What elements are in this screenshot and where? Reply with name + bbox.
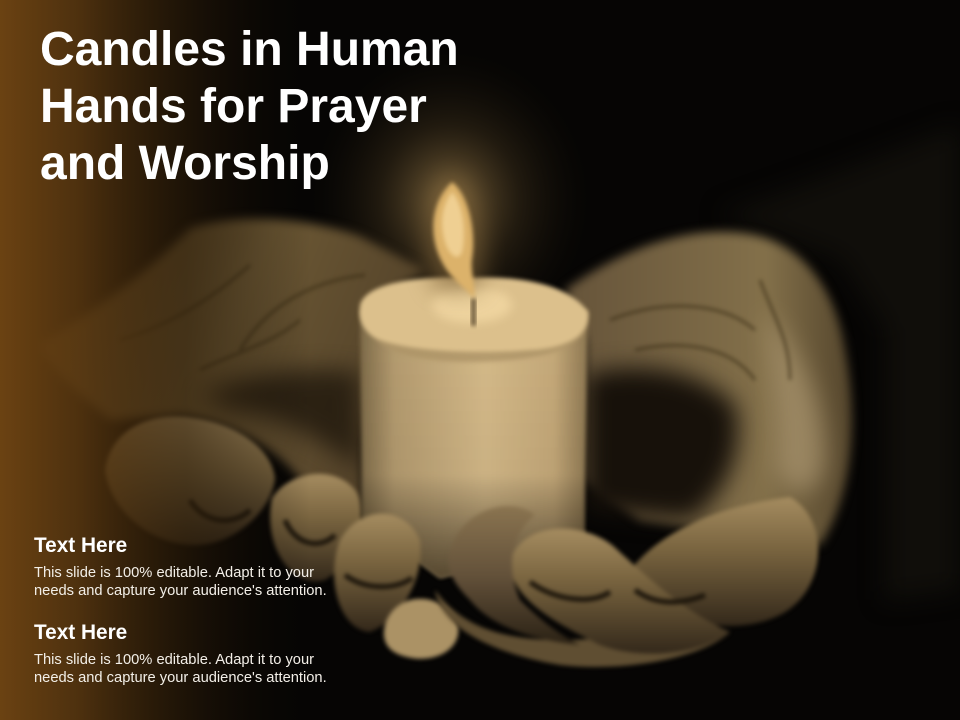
left hand (40, 219, 425, 505)
text block 2: Text Here (34, 621, 127, 644)
candle (360, 277, 588, 578)
glow around flame (310, 50, 590, 350)
text block 1 (34, 534, 327, 599)
text block 2: This slide is 100% editable. Adapt it to your (34, 652, 314, 668)
text block 1: needs and capture your audience's attention. (34, 583, 327, 599)
right fingers (435, 497, 818, 667)
sleeve at right (720, 125, 960, 600)
text block 1: This slide is 100% editable. Adapt it to your (34, 565, 314, 581)
title (40, 23, 459, 190)
title: Candles in Human (40, 23, 459, 76)
text block 1: Text Here (34, 534, 127, 557)
left fingers (105, 416, 458, 659)
text block 2: needs and capture your audience's attention. (34, 670, 327, 686)
title: Hands for Prayer (40, 80, 427, 133)
flame (427, 172, 483, 298)
right hand (565, 232, 852, 545)
title: and Worship (40, 137, 330, 190)
text block 2 (34, 621, 327, 686)
brown gradient overlay at left (0, 0, 310, 720)
